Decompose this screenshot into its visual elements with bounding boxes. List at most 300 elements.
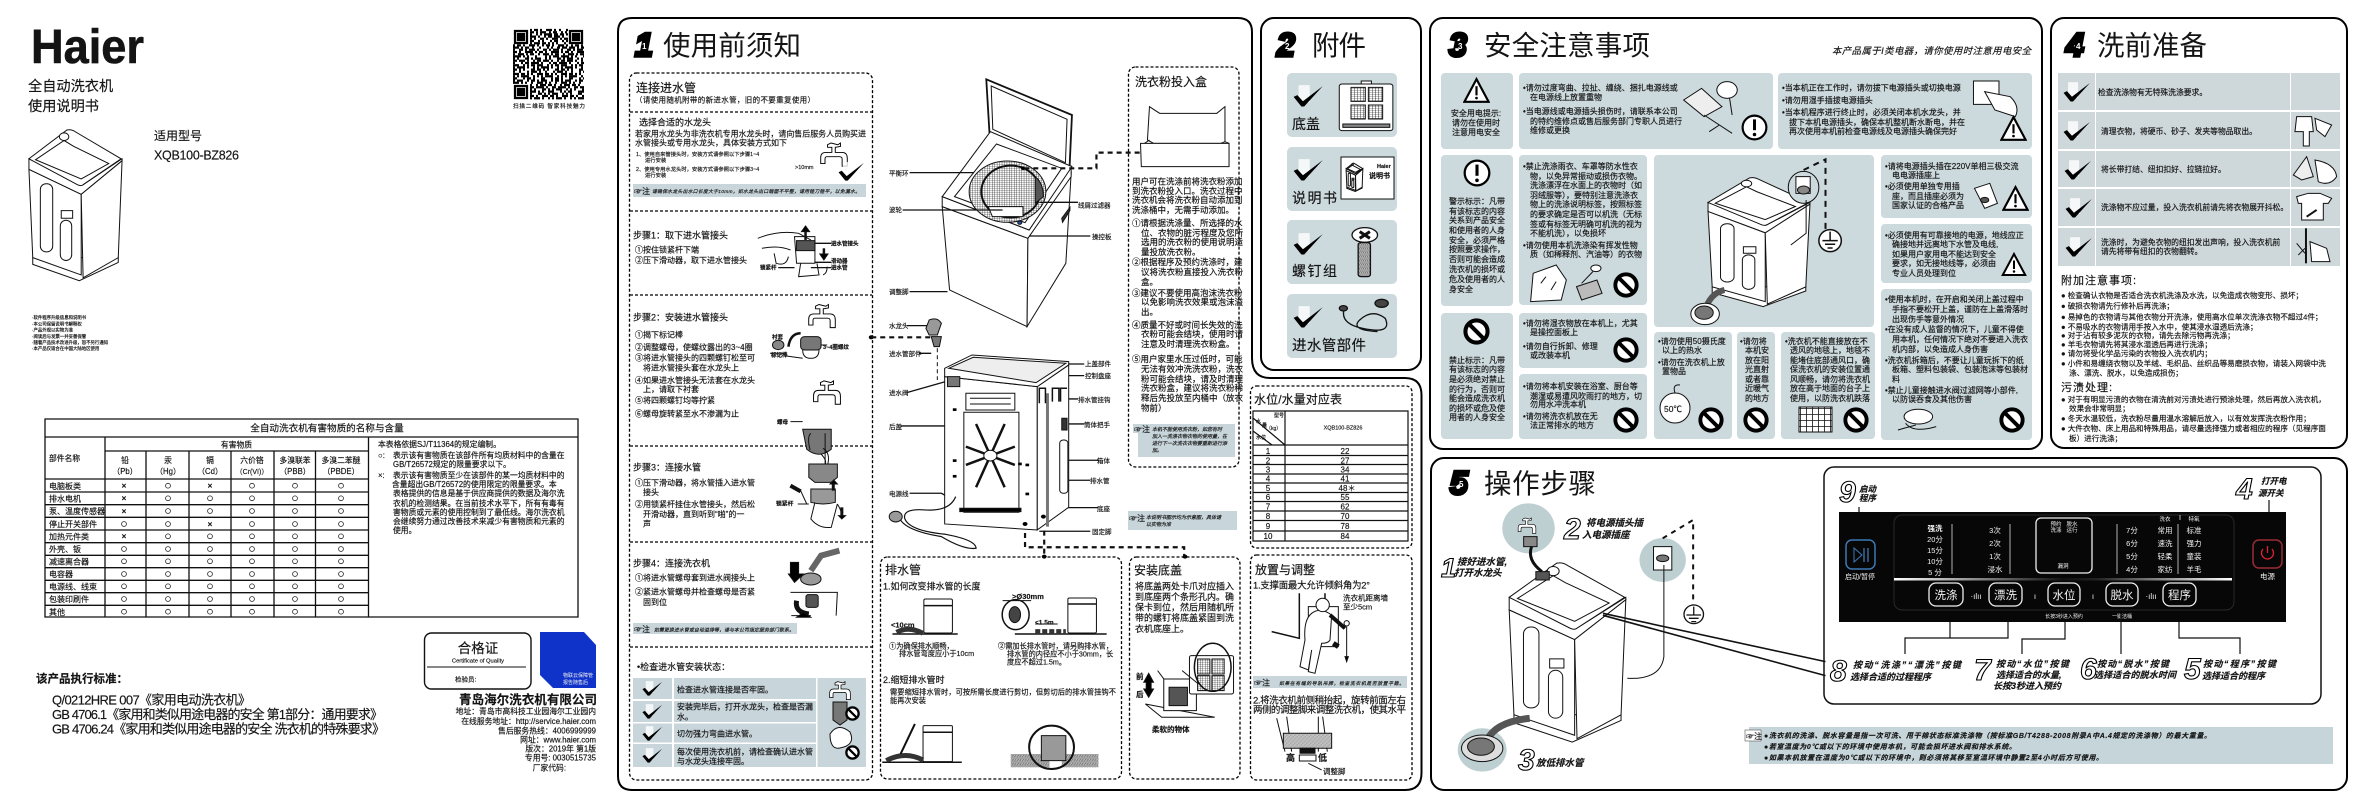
table notes: ×: bbox=[378, 471, 385, 480]
table: hazardous substances: 排水电机 bbox=[49, 494, 81, 504]
step labels: 选择适合的水量, bbox=[1996, 670, 2062, 680]
step 2: 上，请取下衬套 bbox=[643, 384, 699, 394]
company info: 厂家代码: bbox=[533, 762, 566, 772]
child safety notes: 手指不要松开上盖，谨防在上盖滑落时 bbox=[1892, 304, 2028, 314]
table notes: 使用。 bbox=[393, 525, 416, 535]
warning mark notice: 否则可能会造成 bbox=[1449, 254, 1505, 264]
power cord warnings: 维修或更换 bbox=[1530, 125, 1570, 135]
panel: drain hose: 能再次安装 bbox=[890, 696, 926, 705]
step 2: ④如果进水管接头无法套在水龙头 bbox=[635, 375, 755, 385]
child safety notes: 机内部，以免造成人身伤害 bbox=[1892, 344, 1988, 354]
child safety notes: 出现伤手等意外情况 bbox=[1892, 314, 1964, 324]
illustration: adjust foot bbox=[1277, 717, 1332, 770]
socket warnings: •请勿用湿手插拔电源插头 bbox=[1782, 95, 1873, 105]
company info: 在线服务地址：http://service.haier.com bbox=[461, 716, 596, 726]
illustration: base cover bbox=[1144, 643, 1234, 717]
panel: placement and leveling: 高 bbox=[1286, 752, 1295, 763]
hook-up step labels: 2 bbox=[1563, 513, 1581, 546]
detergent text: 以免影响洗衣效果或泡沫溢 bbox=[1141, 297, 1244, 307]
section number 4: 4 bbox=[2065, 27, 2084, 63]
laundry warnings: 羽绒服等），要特别注意洗涤衣 bbox=[1530, 190, 1638, 200]
prohibition mark notice: 用者的人身安全 bbox=[1449, 412, 1505, 422]
checklist bbox=[2058, 73, 2340, 266]
choose faucet: 若家用水龙头为非洗衣机专用水龙头时，请向售后服务人员购买进 bbox=[635, 128, 866, 138]
selector labels: 5分 bbox=[2126, 552, 2138, 561]
illustration: step 3: 锁紧杆 bbox=[776, 500, 794, 508]
selector labels: 7分 bbox=[2126, 526, 2138, 535]
detergent text: 注意及时清理洗衣粉盒。 bbox=[1141, 339, 1235, 349]
step 3: ①压下滑动器，将水管插入进水管 bbox=[635, 478, 755, 488]
additional notes: ● 请勿将受化学品污染的衣物投入洗衣机内； bbox=[2061, 348, 2212, 358]
standards: Q/0212HRE 007《家用电动洗衣机》 bbox=[52, 692, 251, 708]
panel: drain hose: 排水管的内径应不小于30mm，长 bbox=[1007, 650, 1113, 658]
footnote bar bbox=[1745, 727, 2333, 764]
warning mark notice: 和使用者的人身 bbox=[1449, 225, 1505, 235]
socket warnings: 再次使用本机前检查电源线及电源插头确保完好 bbox=[1789, 126, 1957, 136]
selector labels: 童装 bbox=[2186, 551, 2202, 561]
panel: install base cover: 后 bbox=[1136, 689, 1144, 699]
table: hazardous substances: × bbox=[122, 494, 127, 503]
card: manual bbox=[1287, 147, 1397, 211]
hose checklist: 与水龙头连接牢固。 bbox=[677, 756, 749, 766]
table notes: 含量超出GB/T26572的使用限定的限量要求。本 bbox=[392, 479, 557, 489]
part labels: 排水管挂钩 bbox=[1078, 395, 1111, 404]
card: bottom cover: 底盖 bbox=[1292, 116, 1320, 132]
choose faucet: 水管接头或专用水龙头，具体安装方式如下 bbox=[635, 138, 787, 148]
program buttons: 程序 bbox=[2168, 588, 2191, 602]
company info: 网址：www.haier.com bbox=[520, 734, 596, 744]
table: hazardous substances: 包装印刷件 bbox=[49, 594, 89, 604]
hook-up step labels: 入电源插座 bbox=[1582, 529, 1631, 541]
step labels: 4 bbox=[2235, 473, 2253, 506]
panel: install base cover: 衣机底座上。 bbox=[1135, 623, 1189, 634]
table: hazardous substances bbox=[45, 419, 578, 617]
detergent text: 洗涤桶中，无需手动添加。 bbox=[1132, 205, 1234, 215]
table: hazardous substances: × bbox=[208, 520, 213, 529]
step 2: ⑤将四颗螺钉均等拧紧 bbox=[635, 395, 715, 405]
section number 5: 5 bbox=[1450, 465, 1469, 501]
panel 2: accessories: 附件 bbox=[1312, 23, 1366, 63]
note: illustration sample: ☞注 bbox=[1129, 513, 1145, 523]
power cord warnings: •请勿过度弯曲、拉扯、缠绕、捆扎电源线或 bbox=[1523, 82, 1678, 92]
detergent text: 到洗衣粉投入口。洗衣过程中 bbox=[1132, 186, 1243, 196]
table: hazardous substances: 多溴联苯 bbox=[279, 455, 311, 465]
hose checklist: 切勿强力弯曲进水管。 bbox=[677, 728, 757, 738]
water level table: XQB100-BZ826 bbox=[1324, 426, 1362, 432]
part labels: 线屑过滤器 bbox=[1078, 200, 1111, 210]
note: detergent: ☞注 bbox=[1134, 424, 1150, 434]
company info bbox=[456, 692, 597, 772]
table notes: 害物质或元素的使用控制到了最低线。海尔洗衣机 bbox=[393, 507, 565, 517]
selector labels: 轻柔 bbox=[2158, 551, 2173, 561]
water level table: 48＊ bbox=[1339, 484, 1355, 493]
illustrations: drain hose bbox=[882, 598, 1107, 769]
prohibition: hot water: 50℃ bbox=[1664, 404, 1682, 414]
table notes bbox=[378, 439, 565, 535]
selector labels: 家纺 bbox=[2158, 564, 2173, 574]
wiring notes: 电电源插座上 bbox=[1892, 170, 1940, 180]
panel: drain hose: <1.5m bbox=[1035, 620, 1054, 626]
step 1: 步骤1：取下进水管接头 bbox=[633, 230, 728, 240]
step 3: 声 bbox=[643, 518, 651, 528]
cover fine print: ·本产品仅适合在中国大陆地区使用 bbox=[32, 345, 99, 352]
warning mark notice: 关系到产品安全 bbox=[1449, 215, 1505, 225]
part labels bbox=[889, 168, 1112, 536]
panel: drain hose: ②需加长排水管时，请另购排水管， bbox=[998, 642, 1113, 650]
cover fine print: ·随着产品技术改进升级，恕不另行通知 bbox=[32, 339, 108, 346]
power button: 电源 bbox=[2260, 571, 2276, 581]
table: hazardous substances: 多溴二苯醚 bbox=[322, 455, 361, 465]
company info: 专用号: 0030515735 bbox=[525, 752, 597, 762]
step labels: 源开关 bbox=[2258, 488, 2284, 498]
water level table: 型号 bbox=[1274, 412, 1284, 419]
note: detergent: 进行下一次洗衣衣物要重新进行添 bbox=[1152, 440, 1228, 447]
selector labels: 浸水 bbox=[1988, 564, 2003, 574]
panel: drain hose: 排水管弯度应小于10cm bbox=[899, 649, 974, 658]
program buttons: 长按3秒进入预约 bbox=[2045, 613, 2083, 620]
section number 4: 4 bbox=[2076, 42, 2081, 51]
panel: placement and leveling: 两侧的调整脚来调整洗衣机，使其水平 bbox=[1253, 704, 1406, 716]
step 3: ②用锁紧杆挂住水管接头，然后松 bbox=[635, 499, 755, 509]
stain treatment: ● 冬天水温较低，洗衣粉尽量用温水溶解后放入，以有效发挥洗衣粉作用； bbox=[2061, 413, 2311, 423]
water level table: 55 bbox=[1341, 493, 1350, 502]
prohibition mark notice: 的损坏或危及使 bbox=[1449, 403, 1505, 413]
detergent text: 无法有效冲洗洗衣粉，洗衣 bbox=[1141, 364, 1244, 374]
display: 洗涤 bbox=[2050, 526, 2062, 534]
prohibition: carpet: 保洗衣机的安装位置通 bbox=[1790, 364, 1870, 374]
table: hazardous substances: 电容器 bbox=[49, 569, 73, 579]
water level table: 6 bbox=[1266, 493, 1271, 502]
table: hazardous substances: 加热元件类 bbox=[49, 532, 89, 542]
child safety notes: •使用本机时，在开启和关闭上盖过程中 bbox=[1885, 294, 2024, 304]
note bar step 4: 如需更换进水管或自动溢排等，请与本公司指定服务部门联系。 bbox=[654, 626, 794, 634]
panel 5: operating steps bbox=[1431, 458, 2347, 790]
prohibition: wet clothes: •请勿自行拆卸、修理 bbox=[1523, 341, 1598, 351]
wiring notes: 国家认证的合格产品 bbox=[1892, 200, 1964, 210]
panel: install base cover: 带的螺钉将底盖紧固到洗 bbox=[1135, 612, 1234, 623]
step 4: ②紧进水管螺母并检查螺母是否紧 bbox=[635, 586, 755, 596]
laundry warnings bbox=[1523, 161, 1642, 302]
prohibition: hot water: 以上的热水 bbox=[1662, 345, 1702, 355]
illustration: step 1: 锁紧杆 bbox=[760, 264, 777, 272]
part labels: 波轮 bbox=[889, 205, 902, 214]
power cord warnings: 在电源线上放置重物 bbox=[1530, 92, 1602, 102]
note bar bbox=[1253, 676, 1407, 688]
additional notes: ● 小件和易缠绕衣物以及羊绒、毛织品、丝织品等易磨损衣物，请装入网袋中洗 bbox=[2061, 358, 2326, 368]
step labels: 选择适合的程序 bbox=[2202, 671, 2267, 681]
display: 预约 bbox=[2050, 520, 2062, 528]
stain treatment bbox=[2061, 381, 2326, 443]
logo: Haier: Haier bbox=[31, 21, 144, 74]
choose faucet: 2、使用专用水龙头时，安装方式请参照以下步骤3~4 bbox=[636, 165, 759, 173]
part labels: 箱体 bbox=[1097, 456, 1110, 465]
note: detergent bbox=[1133, 424, 1235, 457]
hook-up step labels: 将电源插头插 bbox=[1586, 517, 1645, 529]
panel: cover bbox=[28, 21, 585, 352]
panel: install base cover: 柔软的物体 bbox=[1152, 724, 1190, 734]
section number 3: 3 bbox=[1458, 42, 1463, 51]
choose faucet: 1、使用自来管接头时，安装方式请参照以下步骤1~4 bbox=[636, 150, 759, 158]
selector labels bbox=[1927, 515, 2202, 577]
prohibition: wet clothes: •请勿将湿衣物放在本机上，尤其 bbox=[1523, 318, 1638, 328]
wiring notes: •请将电源插头插在220V单相三极交流 bbox=[1885, 161, 2018, 171]
water level table: 62 bbox=[1341, 502, 1350, 512]
icon: washing machine bbox=[29, 130, 122, 281]
additional notes: ● 破损衣物请先行修补后再洗涤； bbox=[2061, 300, 2174, 310]
panel outline: before use and lower middle bbox=[618, 18, 1422, 790]
water level table: 7 bbox=[1266, 502, 1271, 512]
panel: connect inlet hose bbox=[630, 73, 872, 780]
detergent text: 出。 bbox=[1141, 307, 1158, 317]
illustration: step 1: 进水管接头 bbox=[831, 240, 859, 248]
prohibition: carpet: •洗衣机不能直接放在不 bbox=[1785, 336, 1868, 346]
step 2: ①揭下标记棒 bbox=[635, 330, 683, 340]
table: hazardous substances: （Cd） bbox=[197, 467, 223, 476]
panel: install base cover: 到底座两个条形孔内。确 bbox=[1135, 591, 1234, 602]
step 2: 将进水管接头套在水龙头上 bbox=[643, 362, 739, 372]
part labels: 上盖部件 bbox=[1085, 359, 1112, 368]
panel: placement and leveling: 低 bbox=[1318, 752, 1327, 763]
child safety notes: •禁止儿童接触进水阀过滤网等小部件, bbox=[1885, 385, 2018, 395]
detergent text bbox=[1132, 176, 1244, 413]
socket warnings: •当本机程序进行终止时，必须关闭本机水龙头，并 bbox=[1782, 107, 1961, 117]
additional notes: ● 易掉色的衣物请与其他衣物分开洗涤，使用高水位单次洗涤衣物不超过4件； bbox=[2061, 312, 2323, 322]
electrical safety notice bbox=[1451, 79, 1501, 137]
selector labels: 强力 bbox=[2186, 538, 2202, 548]
company info: 版次：2019年 第1版 bbox=[525, 744, 596, 754]
warning mark notice bbox=[1449, 161, 1505, 294]
QR caption: 扫描二维码 智家科技魅力 bbox=[513, 102, 585, 110]
checklist: 检查洗涤物有无特殊洗涤要求。 bbox=[2098, 87, 2207, 97]
illustration: step 2: 3~4圈螺纹 bbox=[823, 343, 849, 351]
laundry icons bbox=[2293, 117, 2337, 263]
step 3 bbox=[633, 462, 755, 528]
water level table: 8 bbox=[1266, 512, 1271, 521]
table: hazardous substances: 镉 bbox=[206, 456, 214, 465]
prohibition: carpet: 透风的地毯上，地毯不 bbox=[1790, 345, 1870, 355]
prohibition: carpet: 使用，以防洗衣机跌落 bbox=[1790, 393, 1870, 403]
checklist: 洗涤时，为避免衣物的纽扣发出声响，投入洗衣机前 bbox=[2101, 237, 2281, 247]
selector labels: 10分 bbox=[1927, 557, 1943, 566]
checklist: 请先将带有纽扣的衣物翻转。 bbox=[2101, 246, 2202, 256]
selector labels: 5 分 bbox=[1928, 568, 1942, 577]
note bar step 4 bbox=[633, 623, 797, 634]
table notes: 本表格依据SJ/T11364的规定编制。 bbox=[378, 439, 501, 449]
panel 3: safety notes bbox=[1430, 18, 2042, 449]
note bar bbox=[633, 184, 866, 197]
card: screw: 螺钉组 bbox=[1292, 263, 1337, 279]
hose heading: （请使用随机附带的新进水管，旧的不要重复使用） bbox=[635, 94, 815, 104]
part labels: 筒体把手 bbox=[1084, 420, 1110, 429]
water level table: 3 bbox=[1266, 466, 1271, 474]
warning mark notice: 洗衣机的损坏或 bbox=[1449, 264, 1505, 274]
table: hazardous substances: （Hg） bbox=[155, 467, 181, 476]
water level table: 70 bbox=[1341, 512, 1350, 521]
table: hazardous substances: 电源线、线束 bbox=[49, 582, 97, 592]
part labels: 水龙头 bbox=[889, 321, 909, 330]
QR code bbox=[513, 30, 584, 98]
product title bbox=[28, 78, 113, 115]
panel 2: accessories bbox=[1261, 18, 1421, 370]
step 1: ①按住锁紧杆下端 bbox=[635, 244, 699, 254]
laundry warnings: 洗涤漂浮在水面上的衣物时（如 bbox=[1530, 180, 1642, 190]
step 2: ③将进水管接头的四颗螺钉松至可 bbox=[635, 352, 755, 362]
part labels: 电源线 bbox=[889, 489, 909, 498]
step labels: 按动“脱水”按键 bbox=[2097, 659, 2171, 669]
step labels: 选择适合的脱水时间 bbox=[2094, 670, 2178, 680]
illustration: washer parts top bbox=[869, 79, 1187, 559]
prohibition: install location bbox=[1523, 381, 1642, 431]
program buttons: 一键洁桶 bbox=[2112, 613, 2132, 620]
child safety notes: •在没有成人监督的情况下，儿童不得使 bbox=[1885, 324, 2024, 334]
card: inlet hose parts bbox=[1287, 294, 1397, 358]
selector labels: 特氧 bbox=[2188, 515, 2200, 523]
panel: drain hose: 1.如何改变排水管的长度 bbox=[883, 580, 981, 592]
hose checklist bbox=[633, 678, 866, 767]
prohibition: install location: •请勿将洗衣机放在无 bbox=[1523, 411, 1598, 421]
power cord warnings: •当电源线或电源插头损伤时，请联系本公司 bbox=[1523, 106, 1678, 116]
grey blocks bbox=[1441, 73, 2032, 440]
cover fine print: ·阅读后与发票一并妥善保管 bbox=[32, 333, 87, 340]
stain treatment: 效果会非常明显； bbox=[2069, 403, 2130, 413]
standards: GB 4706.1《家用和类似用途电器的安全 第1部分：通用要求》 bbox=[52, 707, 383, 722]
detergent text: 用户可在洗涤前将洗衣粉添加 bbox=[1132, 176, 1243, 186]
step 4: 步骤4：连接洗衣机 bbox=[633, 558, 710, 568]
warning mark notice: 警示标示：凡带 bbox=[1449, 196, 1505, 206]
section number 5: 5 bbox=[1459, 480, 1464, 489]
panel 5: operating steps: 操作步骤 bbox=[1484, 461, 1596, 501]
detergent text: ④质量不好或时间长失效的洗 bbox=[1132, 320, 1243, 330]
model bbox=[154, 129, 239, 162]
detergent text: ②根据程序及预约洗涤时，建 bbox=[1132, 257, 1243, 267]
panel: install base cover: 保卡到位，然后用随机所 bbox=[1135, 602, 1234, 612]
laundry warnings: •请勿使用本机洗涤染有挥发性物 bbox=[1523, 240, 1638, 250]
hose checklist: 安装完毕后，打开水龙头，检查是否漏 bbox=[677, 702, 813, 712]
water level table: 78 bbox=[1341, 522, 1350, 531]
step labels: 9 bbox=[1839, 476, 1856, 509]
electrical safety notice: 请勿在使用时 bbox=[1452, 118, 1500, 128]
electrical safety notice: 注意用电安全 bbox=[1452, 127, 1500, 137]
table notes: ○: bbox=[378, 451, 385, 460]
company info: 售后服务热线：4006999999 bbox=[498, 726, 596, 736]
warning mark notice: 危及使用者的人 bbox=[1449, 274, 1505, 284]
panel: placement and leveling: 洗衣机距离墙 bbox=[1343, 592, 1388, 602]
note: illustration sample: 本说明书图示均为示意图，具体请 bbox=[1146, 514, 1222, 521]
model: XQB100-BZ826 bbox=[154, 148, 239, 162]
product title: 全自动洗衣机 bbox=[28, 78, 113, 95]
step 1: ②压下滑动器，取下进水管接头 bbox=[635, 255, 747, 265]
model: 适用型号 bbox=[154, 129, 202, 143]
prohibition: hot water: •请勿使用50摄氏度 bbox=[1658, 336, 1726, 346]
selector labels: 3次 bbox=[1989, 525, 2001, 535]
laundry warnings: 的要求确定是否可以机洗（无标 bbox=[1530, 209, 1642, 219]
prohibition: wet clothes bbox=[1523, 318, 1638, 361]
note bar: 请确保水龙头出水口长度大于10mm，如水龙头出口端面不平整，请用锉刀锉平，以免漏水。 bbox=[652, 188, 860, 195]
detergent text: 量投放洗衣粉。 bbox=[1141, 247, 1201, 257]
table: hazardous substances: 有害物质 bbox=[221, 440, 252, 450]
cover fine print: ·本公司保留说明书解释权 bbox=[32, 320, 82, 328]
detergent text: 议将洗衣粉直接投入洗衣粉 bbox=[1141, 267, 1244, 277]
display bbox=[2036, 518, 2092, 573]
program buttons: ı bbox=[2034, 592, 2036, 601]
hose checklist: 水。 bbox=[677, 712, 693, 722]
prohibition mark notice bbox=[1449, 320, 1505, 422]
program buttons: 水位 bbox=[2052, 588, 2076, 602]
part labels: 底座 bbox=[1097, 504, 1110, 513]
stain treatment: 板）进行洗涤； bbox=[2069, 433, 2122, 443]
table: hazardous substances: × bbox=[122, 507, 127, 516]
table: hazardous substances: （PBB） bbox=[279, 467, 311, 476]
hose checklist: 检查进水管连接是否牢固。 bbox=[677, 684, 773, 694]
laundry warnings: 不能机洗），以免损坏 bbox=[1530, 228, 1606, 238]
selector labels: 6分 bbox=[2126, 539, 2138, 548]
certificate of quality bbox=[424, 633, 531, 689]
laundry warnings: •禁止洗涤雨衣、车罩等防水性衣 bbox=[1523, 161, 1638, 171]
child safety notes: 以防误吞食及其他伤害 bbox=[1892, 394, 1972, 404]
child safety notes bbox=[1885, 294, 2028, 431]
panel: placement and leveling: 调整脚 bbox=[1323, 766, 1346, 776]
start/pause button: 启动/暂停 bbox=[1845, 572, 1875, 581]
step labels: 8 bbox=[1830, 655, 1847, 688]
water level table: 41 bbox=[1341, 474, 1350, 484]
table: hazardous substances: 全自动洗衣机有害物质的名称与含量 bbox=[250, 422, 404, 434]
detergent text: ③建议不要使用高泡沫洗衣粉 bbox=[1132, 288, 1243, 298]
section number 3: 3 bbox=[1449, 27, 1467, 63]
product title: 使用说明书 bbox=[28, 98, 99, 115]
panel: water level table bbox=[1250, 386, 1412, 548]
panel: placement and leveling: 2.将洗衣机前侧稍抬起，旋转前面左右 bbox=[1253, 694, 1406, 706]
cover fine print: ·产品外观以实物为准 bbox=[32, 326, 74, 334]
water level table: （kg） bbox=[1266, 426, 1281, 432]
illustration: step 1: 滑动器 bbox=[831, 257, 848, 265]
panel: install base cover: 将底盖两处卡爪对应插入 bbox=[1135, 580, 1234, 592]
table: hazardous substances: 减速离合器 bbox=[49, 556, 89, 566]
panel 1: before use bbox=[630, 18, 2347, 790]
panel: detergent box bbox=[1128, 67, 1244, 467]
prohibition: install location: 勿用水冲洗本机 bbox=[1530, 399, 1586, 409]
hose heading bbox=[635, 80, 815, 104]
hook-up step labels: 1 bbox=[1441, 553, 1456, 583]
step 4 bbox=[633, 558, 755, 607]
table: hazardous substances: （Cr(VI)） bbox=[236, 468, 268, 476]
prohibition: hot water: •请勿在洗衣机上放 bbox=[1658, 357, 1725, 367]
laundry warnings: 质（如稀释剂、汽油等）的衣物 bbox=[1530, 249, 1642, 259]
water level table: 27 bbox=[1341, 456, 1350, 466]
footnote bar: ●若室温度为0℃或以下的环境中使用本机，可能会损坏进水阀和排水系统。 bbox=[1764, 742, 2016, 751]
note: detergent: 加入一洗涤衣物衣物的使用量，在 bbox=[1152, 433, 1228, 440]
program buttons: ·ılıı bbox=[2145, 592, 2157, 601]
water level table bbox=[1253, 411, 1408, 541]
panel: install base cover: 前 bbox=[1136, 671, 1144, 681]
prohibition: install location: 法正常排水的地方 bbox=[1530, 420, 1594, 430]
heading: 使用前须知 bbox=[663, 23, 801, 63]
choose faucet bbox=[635, 116, 866, 179]
selector labels: 强洗 bbox=[1928, 523, 1943, 533]
hose heading: 连接进水管 bbox=[636, 80, 696, 95]
panel: drain hose: 排水管 bbox=[885, 562, 921, 577]
wiring notes: •必须使用单独专用插 bbox=[1885, 181, 1960, 191]
step labels: 5 bbox=[2184, 653, 2202, 686]
socket warnings bbox=[1782, 81, 2026, 140]
table: hazardous substances: × bbox=[208, 482, 213, 490]
program buttons: 漂洗 bbox=[1994, 589, 2017, 602]
prohibition: sunlight: 或者靠 bbox=[1745, 374, 1769, 384]
electrical safety notice: 安全用电提示: bbox=[1451, 108, 1501, 118]
part labels: 进水阀 bbox=[889, 388, 908, 397]
additional notes: ● 不易吸水的衣物请用手按入水中，使其浸水湿透后洗涤； bbox=[2061, 322, 2258, 332]
certificate of quality: 检验员: bbox=[455, 674, 476, 684]
child safety notes: 板箱、塑料包装袋、包装泡沫等包装材 bbox=[1892, 364, 2028, 374]
